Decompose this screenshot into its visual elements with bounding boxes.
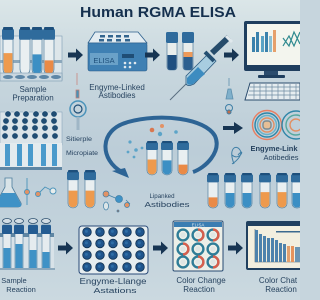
- heading: sample preparation: Sample: [19, 85, 47, 94]
- icon: magnifier molecule: [70, 101, 86, 130]
- icon: small molecule upper: [226, 104, 232, 114]
- arrow 1: [68, 48, 83, 62]
- panel: sample reaction rack: [0, 218, 55, 270]
- heading: color chart reaction: Color Chat: [259, 276, 298, 285]
- icon: ELISA plate reader: [88, 32, 147, 71]
- arrow 6: [153, 242, 168, 254]
- heading: color chart reaction: Reaction: [265, 285, 297, 294]
- row of tubes: [207, 173, 303, 208]
- panel: result bar chart: [246, 221, 304, 270]
- panel: sample preparation rack: [0, 27, 62, 81]
- label: astations: Astations: [94, 286, 137, 295]
- heading: color change reaction: Color Change: [176, 276, 226, 285]
- heading: sample preparation: Preparation: [12, 94, 54, 102]
- heading: enzyme-linked: Engyme-Link: [250, 144, 298, 153]
- label: micropiate: Micropiate: [66, 150, 98, 157]
- arrow 7: [228, 242, 243, 254]
- tubes pair: [67, 170, 96, 208]
- title: Human RGMA ELISA: [80, 5, 237, 21]
- panel: color change plate: [173, 221, 223, 271]
- heading: enzyme-linked antibodies: Engyme-Linked: [89, 83, 145, 92]
- panel: microplate rack: [0, 111, 62, 170]
- icon: keyboard: [245, 83, 300, 100]
- tubes in cycle: [146, 141, 189, 175]
- icon: small pipette: [76, 73, 79, 98]
- icon: concentric circles: [252, 110, 310, 140]
- label: linked: Lipanked: [150, 193, 175, 200]
- icon: molecule cluster: [103, 191, 130, 212]
- icon: small flask top: [226, 78, 233, 99]
- icon: molecule dots: [127, 124, 178, 158]
- icon: syringe: [170, 36, 232, 100]
- heading: enzyme-linked antibodies: Astibodies: [99, 91, 135, 100]
- icon: molecules: [24, 178, 56, 205]
- heading: sample reaction: Reaction: [6, 285, 36, 294]
- arrow 3: [224, 48, 239, 62]
- heading: color change reaction: Reaction: [183, 285, 215, 294]
- arrow 4: [223, 122, 243, 134]
- label: antibodies: Astibodies: [144, 200, 190, 209]
- icon: ELISA plate reader: ELISA: [93, 56, 115, 65]
- icon: monitor with charts: [244, 21, 304, 78]
- icon: flask: [0, 178, 21, 207]
- label: sitierple: Sitierple: [66, 136, 92, 143]
- heading: enzyme-llange: Engyme-Llange: [80, 277, 147, 286]
- icon: two tubes: [166, 32, 194, 70]
- icon: stethoscope-like molecule: [232, 147, 242, 164]
- heading: sample reaction: Sample: [1, 276, 27, 285]
- arrow 5: [58, 242, 73, 254]
- panel: color change plate: ELISA: [192, 222, 204, 228]
- icon: circular arrow: [105, 118, 217, 172]
- icon: arrowhead: [112, 168, 129, 178]
- panel: enzyme plate: [79, 226, 148, 274]
- arrow 2: [145, 48, 160, 62]
- heading: antibodies: Aotibedies: [263, 153, 299, 162]
